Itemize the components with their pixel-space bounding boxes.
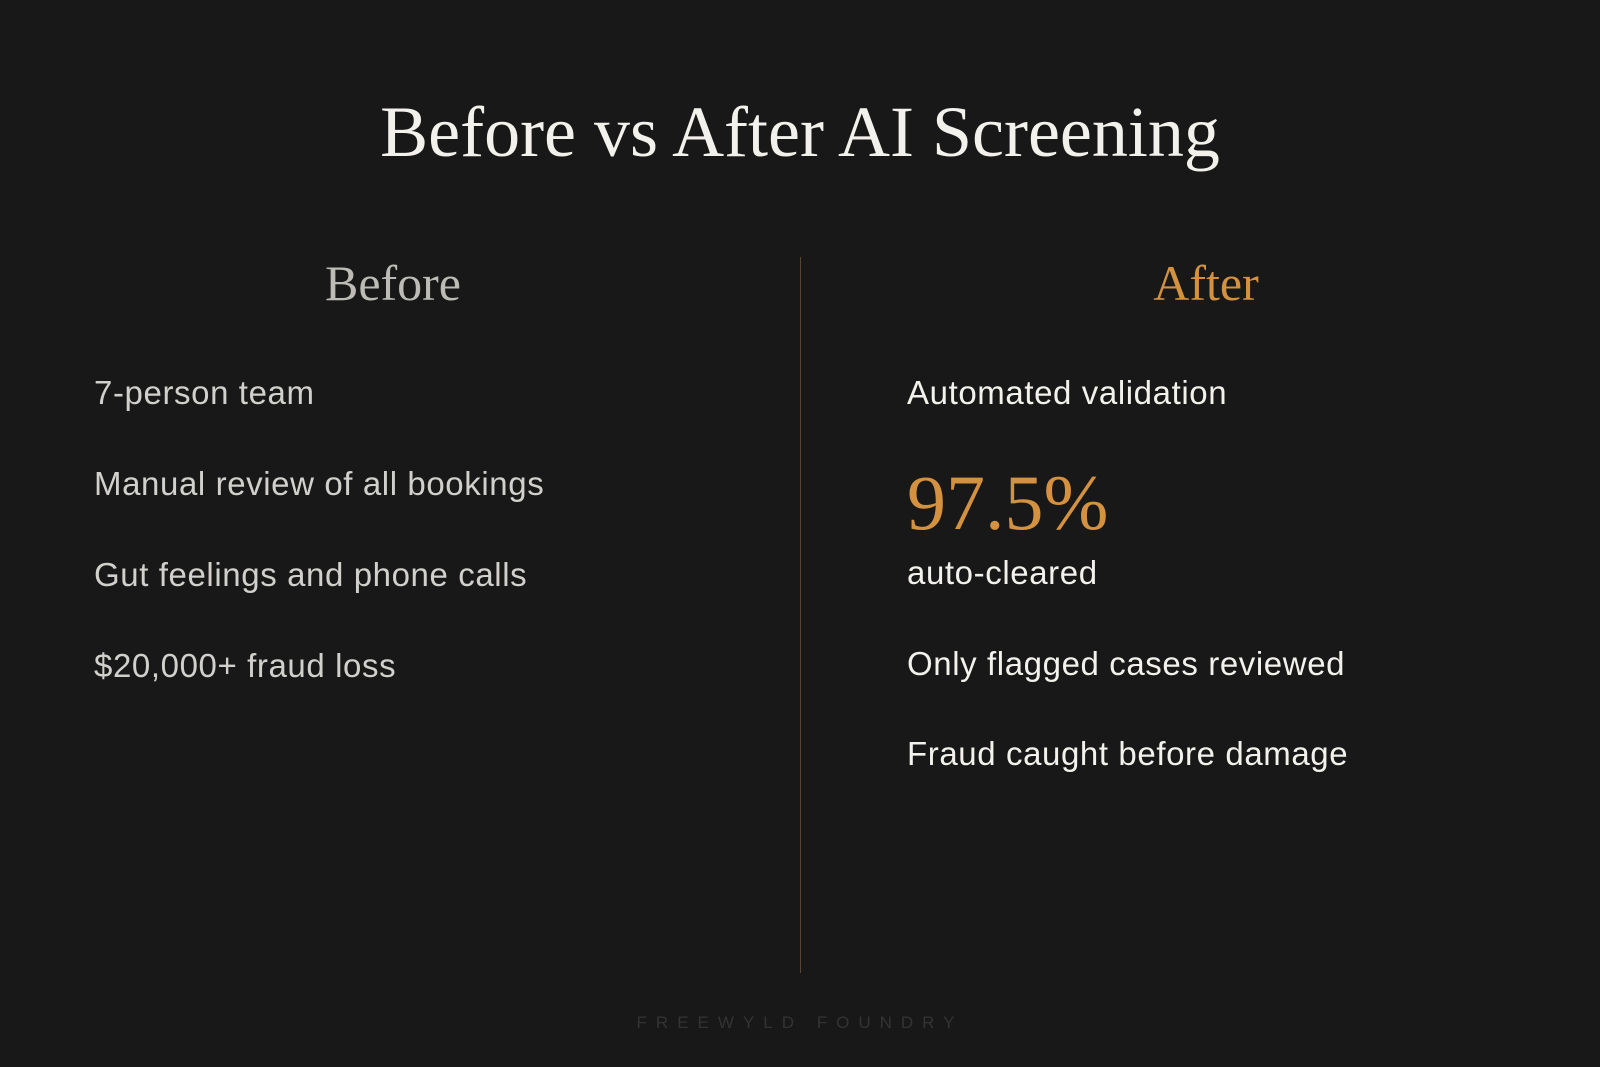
item: auto-cleared: auto-cleared (907, 554, 1098, 591)
item: team: 7-person team (94, 374, 315, 411)
item: automated: Automated validation (907, 374, 1227, 411)
title: Before vs After AI Screening (380, 92, 1220, 172)
stat: 97.5%: 97.5% (907, 459, 1108, 546)
heading: before: Before (325, 255, 461, 311)
panel: before (94, 255, 544, 684)
item: gut feelings: Gut feelings and phone calls (94, 556, 527, 593)
heading: after: After (1153, 255, 1259, 311)
panel: after (907, 255, 1348, 772)
footer: FREEWYLD FOUNDRY (637, 1013, 963, 1032)
item: fraud caught: Fraud caught before damage (907, 735, 1348, 772)
divider (800, 257, 801, 973)
item: manual review: Manual review of all bookings (94, 465, 544, 502)
item: fraud loss: $20,000+ fraud loss (94, 647, 396, 684)
item: flagged: Only flagged cases reviewed (907, 645, 1345, 682)
